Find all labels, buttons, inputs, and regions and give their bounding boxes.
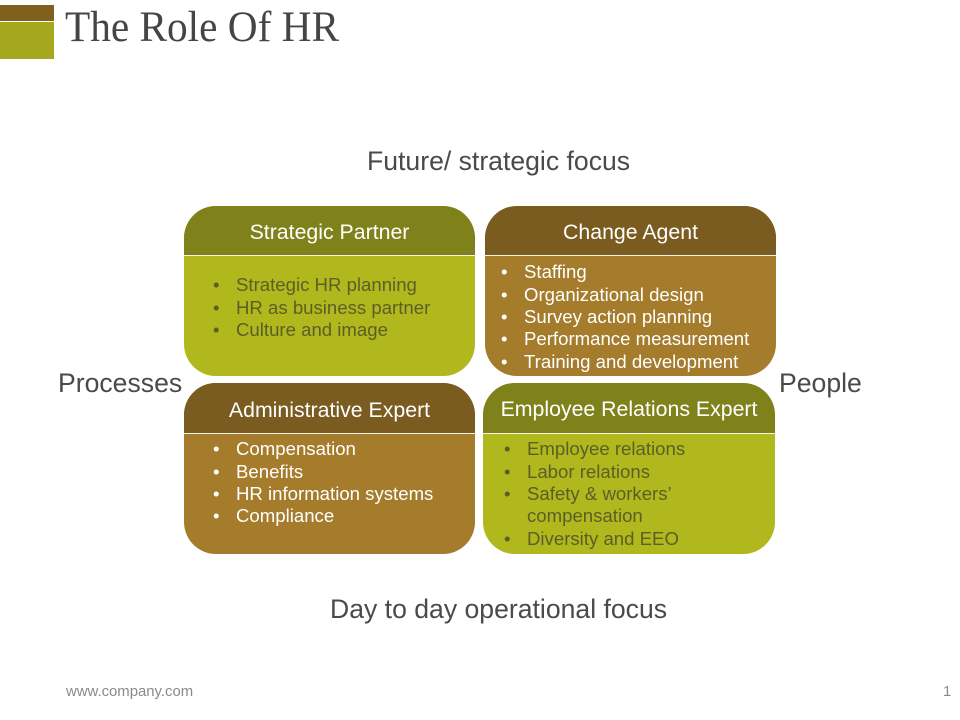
heading: Employee Relations Expert: Employee Relations Expert [501,397,757,421]
list: Administrative Expert items: Compensation [236,438,356,459]
left axis label: Processes [58,368,182,398]
list: Administrative Expert items: Benefits [236,461,303,482]
list: Employee Relations Expert items: Employee relations [527,438,685,459]
panel: Strategic Partner: • [213,297,220,318]
list: Employee Relations Expert items: Diversity and EEO [527,528,679,549]
heading: Strategic Partner [184,206,475,255]
panel: Change Agent: • [501,306,508,327]
list: Administrative Expert items: Compliance [236,505,334,526]
panel: Administrative Expert: • [213,461,220,482]
list: Strategic Partner items [213,274,430,340]
heading: Change Agent: Change Agent [563,220,698,244]
footer url: www.company.com [66,684,193,700]
panel: Administrative Expert: • [213,438,220,459]
panel: Administrative Expert: • [213,483,220,504]
title: The Role Of HR [65,4,339,51]
list: Employee Relations Expert items: Labor relations [527,461,650,482]
list: Change Agent items [501,261,750,372]
panel: Change Agent: • [501,284,508,305]
panel: Employee Relations Expert: • [504,483,511,504]
panel: Change Agent: • [501,328,508,349]
heading: Administrative Expert: Administrative Expert [229,398,430,422]
logo mark [0,5,54,59]
list: Employee Relations Expert items: Safety & workers’ [527,483,672,504]
list: Strategic Partner items: Strategic HR planning [236,274,417,295]
list: Change Agent items: Training and development [524,351,738,372]
panel: Administrative Expert [184,383,475,554]
list: Employee Relations Expert items: compensation [527,505,643,526]
heading: Strategic Partner: Strategic Partner [250,220,409,244]
heading: Change Agent [485,206,776,255]
top axis label: Future/ strategic focus [367,146,630,176]
list: Employee Relations Expert items [504,438,685,549]
list: Strategic Partner items: HR as business partner [236,297,430,318]
right axis label: People [779,368,862,398]
list: Change Agent items: Performance measurement [524,328,749,349]
list: Change Agent items: Staffing [524,261,587,282]
panel: Change Agent: • [501,261,508,282]
list: Change Agent items: Survey action planning [524,306,712,327]
panel: Employee Relations Expert [483,383,775,554]
panel: Strategic Partner: • [213,319,220,340]
panel: Change Agent: • [501,351,508,372]
panel: Strategic Partner: • [213,274,220,295]
heading: Employee Relations Expert [483,383,775,433]
panel: Employee Relations Expert: • [504,438,511,459]
panel: Employee Relations Expert: • [504,528,511,549]
list: Administrative Expert items: HR information systems [236,483,433,504]
list: Strategic Partner items: Culture and image [236,319,388,340]
page number: 1 [943,684,951,700]
heading: Administrative Expert [184,383,475,433]
list: Change Agent items: Organizational design [524,284,704,305]
list: Administrative Expert items [213,438,433,526]
bottom axis label: Day to day operational focus [330,594,667,624]
panel: Employee Relations Expert: • [504,461,511,482]
panel: Strategic Partner [184,206,475,376]
panel: Change Agent [485,206,776,376]
panel: Administrative Expert: • [213,505,220,526]
